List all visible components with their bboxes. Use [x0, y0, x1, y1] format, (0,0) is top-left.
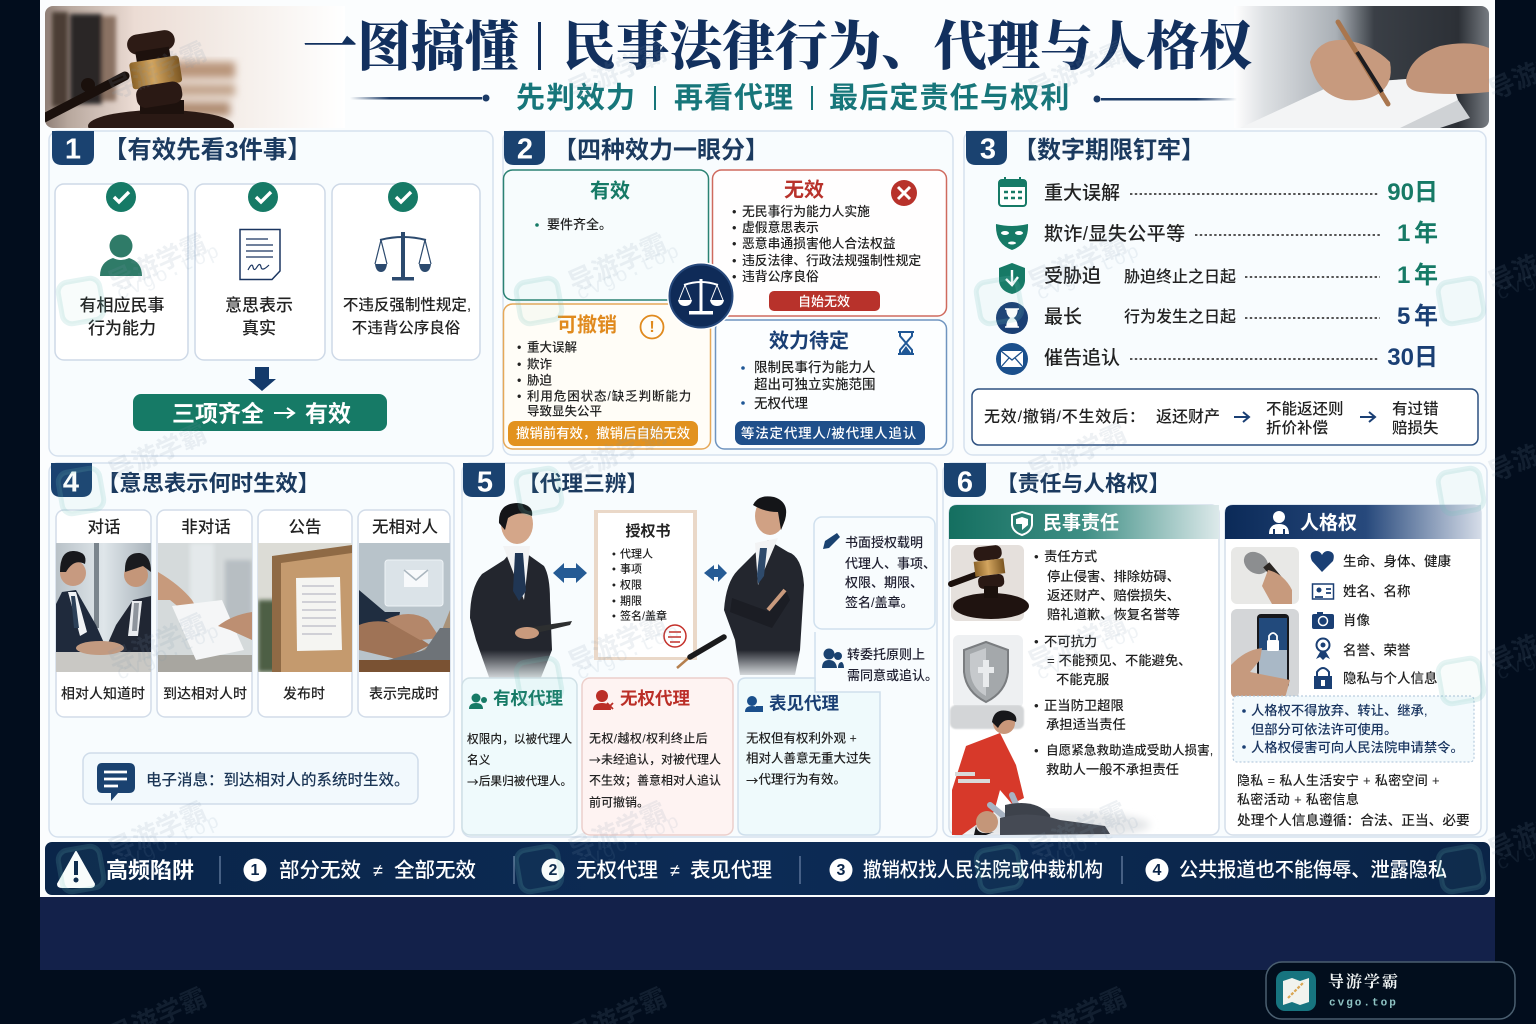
row: demand ratification: 催告追认: [1044, 347, 1120, 369]
photo: shield: [953, 635, 1023, 708]
document: power of attorney: [594, 510, 724, 668]
watermarks: 导游学霸: [104, 228, 211, 298]
card: void: 违反法律、行政法规强制性规定: [742, 253, 921, 268]
header banner: [45, 6, 1489, 128]
illustration: agent: [724, 496, 810, 680]
watermarks: cvgo.top: [113, 620, 225, 687]
watermarks: cvgo.top: [1033, 620, 1145, 687]
note: written authorization: 权限、期限、: [845, 575, 923, 590]
card: dialogue: 相对人知道时: [61, 686, 145, 702]
result button: 有效: [305, 400, 351, 426]
trap 2: 无权代理: [576, 859, 658, 882]
card: valid: [504, 170, 708, 300]
card: dialogue: [56, 510, 151, 717]
card: genuine intent: [195, 182, 325, 360]
text: liability methods: [1034, 548, 1213, 777]
box: consequences after invalidity: [972, 389, 1478, 445]
watermarks: 导游学霸: [564, 608, 671, 678]
card: void: 无民事行为能力人实施: [742, 204, 870, 219]
photo: gavel: [951, 544, 1029, 621]
row: duress: 1 年: [1397, 262, 1438, 289]
card: pending: 等法定代理人/被代理人追认: [741, 425, 917, 441]
card: unauthorized agency: 前可撤销。: [589, 794, 649, 810]
badge 1: [52, 131, 94, 166]
text: liability methods: = 不能预见、不能避免、: [1047, 652, 1191, 668]
card: voidable: 利用危困状态/缺乏判断能力: [527, 388, 692, 404]
watermarks: 导游学霸: [1024, 608, 1131, 678]
panel 4: when declaration takes effect: [49, 463, 454, 837]
card: unauthorized agency: →未经追认，对被代理人: [589, 751, 721, 768]
illustration: principal: [470, 503, 575, 684]
card: void: [712, 170, 946, 316]
watermarks: 导游学霸: [1024, 36, 1131, 106]
brand badge: 导游学霸: [1328, 973, 1400, 991]
card: void: 虚假意思表示: [742, 220, 819, 235]
trap 3: 3: [837, 862, 846, 879]
box: consequences after invalidity: 返还财产: [1156, 408, 1220, 426]
box: consequences after invalidity: 有过错: [1392, 400, 1439, 418]
card: no counterparty: 无相对人: [372, 518, 438, 536]
watermarks: 导游学霸: [1024, 228, 1131, 298]
watermarks: cvgo.top: [573, 620, 685, 687]
badge 3: 3: [980, 134, 996, 166]
card: public notice: 公告: [288, 518, 322, 536]
heading 4: 【意思表示何时生效】: [97, 471, 320, 496]
watermarks: 导游学霸: [564, 36, 671, 106]
card: pending: 无权代理: [754, 396, 808, 411]
document: power of attorney: •: [612, 610, 616, 622]
card: capacity: 有相应民事: [80, 296, 164, 315]
card: pending: 效力待定: [769, 328, 849, 352]
note: written authorization: 书面授权载明: [845, 535, 923, 550]
card: authorized agency: 有权代理: [493, 688, 563, 708]
row: demand ratification: [996, 343, 1438, 375]
watermarks: 导游学霸: [104, 418, 211, 488]
card: genuine intent: 意思表示: [225, 296, 293, 315]
note: personality rights rules: 人格权侵害可向人民法院申请禁令。: [1251, 739, 1464, 755]
watermarks: 导游学霸: [564, 418, 671, 488]
badge 4: 4: [63, 466, 79, 498]
watermarks: cvgo.top: [1033, 810, 1145, 877]
card: pending: 限制民事行为能力人: [754, 360, 876, 375]
card: pending: 超出可独立实施范围: [754, 376, 876, 392]
footer: frequent traps: [45, 842, 1490, 895]
subtitle: 先判效力: [516, 82, 636, 114]
panel 6: liability and personality rights: [943, 463, 1487, 839]
card: no counterparty: 表示完成时: [369, 686, 439, 702]
card: personality rights: [1225, 505, 1481, 835]
card: apparent agency: 相对人善意无重大过失: [746, 750, 872, 766]
card: civil liability: [949, 505, 1219, 839]
text: privacy definition: 处理个人信息遵循：合法、正当、必要: [1237, 812, 1470, 828]
card: non-dialogue: 到达相对人时: [163, 686, 247, 702]
subtitle: 再看代理: [674, 82, 794, 114]
document: power of attorney: 期限: [620, 594, 642, 608]
panel 3: time limits: [964, 131, 1486, 455]
icon list: rights: 名誉、荣誉: [1343, 643, 1411, 658]
card: void: 自始无效: [798, 294, 850, 309]
heading 2: 【四种效力一眼分】: [553, 137, 769, 164]
note: written authorization: 签名/盖章。: [845, 595, 914, 610]
document: power of attorney: 签名/盖章: [620, 608, 667, 622]
watermarks: cvgo.top: [573, 240, 685, 307]
text: liability methods: 返还财产、赔偿损失、: [1047, 588, 1180, 603]
text: privacy definition: 私密活动 + 私密信息: [1237, 792, 1359, 807]
text: privacy definition: 隐私 = 私人生活安宁 + 私密空间 +: [1237, 773, 1440, 788]
box: consequences after invalidity: 赔损失: [1392, 419, 1439, 437]
row: maximum: [996, 302, 1438, 334]
note: personality rights rules: 人格权不得放弃、转让、继承,: [1251, 702, 1428, 718]
card: void: 无效: [784, 178, 824, 202]
icon list: rights: 隐私与个人信息: [1343, 670, 1438, 686]
watermarks: 导游学霸: [1024, 796, 1131, 866]
card: pending: [716, 320, 946, 449]
icon list: rights: 生命、身体、健康: [1343, 553, 1451, 569]
row: maximum: 最长: [1044, 306, 1082, 328]
label: frequent traps: 高频陷阱: [106, 858, 194, 883]
arrow: double: [553, 563, 587, 583]
box: consequences after invalidity: 无效/撤销/不生效后：: [984, 408, 1146, 426]
photo: locked phone: [1231, 609, 1299, 698]
note: written authorization: 代理人、事项、: [845, 556, 936, 571]
note: personality rights rules: [1233, 696, 1474, 762]
document: power of attorney: •: [612, 596, 616, 608]
badge 2: 2: [517, 134, 533, 166]
row: duress: [999, 262, 1438, 294]
trap 4: 4: [1153, 862, 1162, 879]
text: liability methods: •: [1034, 549, 1039, 564]
row: maximum: 行为发生之日起: [1124, 308, 1236, 326]
document: power of attorney: •: [612, 548, 616, 560]
photo: hand signing: [1234, 6, 1489, 128]
trap 1: 1: [251, 862, 260, 879]
card: voidable: 可撤销: [557, 314, 617, 336]
trap 2: 表见代理: [690, 859, 772, 882]
callout: electronic message: [83, 753, 418, 804]
card: apparent agency: 无权但有权利外观 +: [746, 730, 857, 746]
row: fraud: 1 年: [1397, 220, 1438, 247]
icon list: rights: [1311, 551, 1451, 689]
row: fraud: 欺诈/显失公平等: [1044, 223, 1185, 245]
title: 民事法律行为、代理与人格权: [563, 18, 1252, 76]
card: void: 违背公序良俗: [742, 269, 819, 284]
card: dialogue: 对话: [88, 518, 120, 536]
card: non-dialogue: [157, 510, 252, 717]
card: public notice: [258, 510, 352, 717]
card: lawful: [332, 182, 480, 360]
heading 3: 【数字期限钉牢】: [1013, 137, 1205, 164]
watermarks: 导游学霸: [1024, 418, 1131, 488]
card: voidable: 欺诈: [527, 356, 553, 372]
text: liability methods: 不可抗力: [1044, 633, 1097, 649]
watermarks: 导游学霸: [104, 796, 211, 866]
trap 2: ≠: [670, 860, 680, 880]
document: power of attorney: 事项: [620, 562, 642, 576]
watermarks: 导游学霸: [104, 36, 211, 106]
card: void: •: [732, 253, 736, 268]
card: voidable: 重大误解: [527, 340, 578, 354]
note: sub-delegation: 需同意或追认。: [847, 668, 938, 683]
row: major mistake: [999, 177, 1438, 206]
card: apparent agency: [738, 678, 880, 835]
badge 6: 6: [957, 466, 973, 498]
note: personality rights rules: 但部分可依法许可使用。: [1251, 721, 1397, 737]
text: liability methods: •: [1034, 698, 1039, 713]
box: consequences after invalidity: 折价补偿: [1266, 419, 1328, 437]
row: duress: 胁迫终止之日起: [1124, 268, 1236, 286]
title: 一图搞懂: [303, 18, 519, 78]
text: liability methods: 正当防卫超限: [1044, 698, 1124, 713]
card: unauthorized agency: [582, 678, 733, 835]
trap 3: 撤销权找人民法院或仲裁机构: [863, 858, 1103, 882]
card: void: •: [732, 220, 736, 235]
card: voidable: [504, 304, 710, 449]
text: liability methods: 承担适当责任: [1046, 717, 1126, 732]
badge 4: [51, 463, 92, 498]
row: major mistake: 重大误解: [1044, 182, 1120, 204]
row: demand ratification: 30日: [1387, 344, 1438, 371]
text: liability methods: 不能克服: [1056, 672, 1109, 687]
watermarks: cvgo.top: [573, 810, 685, 877]
watermarks: cvgo.top: [1033, 240, 1145, 307]
arrow down: [248, 367, 276, 391]
card: voidable: •: [517, 390, 521, 404]
card: voidable: •: [517, 374, 521, 388]
row: maximum: 5 年: [1397, 303, 1438, 330]
card: civil liability: 民事责任: [1043, 512, 1119, 534]
text: liability methods: 责任方式: [1044, 548, 1097, 564]
text: liability methods: 救助人一般不承担责任: [1046, 762, 1179, 777]
note: sub-delegation: 转委托原则上: [847, 647, 925, 662]
trap 2: 2: [549, 862, 558, 879]
note: sub-delegation: [814, 630, 938, 690]
text: liability methods: 停止侵害、排除妨碍、: [1047, 568, 1180, 584]
icon: warning: [58, 852, 94, 887]
card: apparent agency: →代理行为有效。: [746, 770, 846, 789]
result button: [133, 394, 387, 431]
card: no counterparty: [358, 510, 450, 717]
badge 3: [966, 131, 1007, 166]
text: liability methods: 自愿紧急救助造成受助人损害,: [1046, 742, 1213, 758]
card: void: •: [732, 269, 736, 284]
panel 5: three kinds of agency: [462, 463, 938, 837]
card: valid: 要件齐全。: [547, 217, 612, 232]
trap 2: [542, 858, 772, 882]
subtitle: [350, 82, 1237, 114]
badge 2: [504, 131, 545, 166]
card: voidable: •: [517, 340, 521, 354]
icon list: rights: 姓名、名称: [1343, 584, 1411, 599]
watermarks: cvgo.top: [113, 240, 225, 307]
card: capacity: 行为能力: [88, 319, 156, 338]
card: valid: 有效: [590, 180, 630, 202]
text: privacy definition: [1237, 773, 1470, 828]
watermarks: cvgo.top: [113, 810, 225, 877]
text: liability methods: •: [1034, 634, 1039, 649]
icon: scales seal: [667, 262, 735, 330]
card: authorized agency: 名义: [467, 753, 491, 767]
card: public notice: 发布时: [283, 686, 325, 702]
photo: hand with microphone: [1231, 547, 1299, 604]
card: unauthorized agency: 无权代理: [620, 688, 690, 708]
row: duress: 受胁迫: [1044, 265, 1101, 287]
photo: first responder: [950, 705, 1150, 839]
row: major mistake: 90日: [1387, 179, 1438, 206]
card: voidable: •: [517, 358, 521, 372]
text: liability methods: 赔礼道歉、恢复名誉等: [1047, 606, 1180, 622]
badge 5: [463, 463, 505, 498]
card: personality rights: 人格权: [1300, 512, 1357, 534]
watermarks: 导游学霸: [564, 796, 671, 866]
document: power of attorney: 代理人: [620, 548, 653, 560]
trap 1: 部分无效: [279, 859, 361, 882]
badge 5: 5: [477, 466, 493, 498]
subtitle: 最后定责任与权利: [829, 82, 1071, 114]
row: fraud: [996, 220, 1438, 250]
heading 5: 【代理三辨】: [518, 471, 648, 496]
callout: electronic message: 电子消息：到达相对人的系统时生效。: [146, 770, 410, 789]
heading 6: 【责任与人格权】: [996, 471, 1170, 496]
card: unauthorized agency: 无权/越权/权利终止后: [589, 730, 708, 746]
trap 4: 公共报道也不能侮辱、泄露隐私: [1179, 858, 1447, 882]
document: power of attorney: 授权书: [625, 522, 671, 540]
card: apparent agency: 表见代理: [769, 694, 839, 714]
text: liability methods: •: [1034, 743, 1039, 758]
brand badge: [1266, 962, 1515, 1019]
watermarks: 导游学霸: [104, 608, 211, 678]
document: power of attorney: 权限: [620, 578, 642, 592]
card: lawful: 不违背公序良俗: [352, 318, 461, 337]
box: consequences after invalidity: 不能返还则: [1266, 400, 1344, 418]
card: capacity: [55, 182, 188, 360]
badge 1: 1: [65, 134, 81, 166]
card: void: •: [732, 204, 736, 219]
arrow: right: [704, 564, 727, 582]
card: genuine intent: 真实: [242, 318, 276, 338]
card: voidable: 胁迫: [527, 372, 553, 388]
document: power of attorney: •: [612, 564, 616, 576]
panel 1: three conditions of validity: [49, 131, 493, 456]
card: authorized agency: →后果归被代理人。: [467, 773, 572, 790]
card: authorized agency: [462, 678, 577, 835]
note: written authorization: [814, 517, 936, 629]
card: unauthorized agency: 不生效；善意相对人追认: [589, 772, 721, 788]
card: voidable: !: [649, 319, 655, 336]
card: authorized agency: 权限内，以被代理人: [467, 732, 573, 746]
card: void: 恶意串通损害他人合法权益: [742, 236, 896, 251]
trap 1: [244, 858, 476, 882]
card: voidable: 撤销前有效，撤销后自始无效: [516, 425, 691, 441]
document: power of attorney: •: [612, 580, 616, 592]
result button: 三项齐全: [172, 400, 264, 426]
icon list: rights: 肖像: [1343, 613, 1370, 628]
photo: judge gavel: [45, 6, 300, 128]
trap 1: 全部无效: [394, 859, 476, 882]
brand badge: cvgo.top: [1329, 998, 1398, 1010]
watermarks: 导游学霸: [564, 228, 671, 298]
heading 1: 【有效先看3件事】: [103, 137, 312, 164]
panel 2: four kinds of validity: [503, 131, 953, 455]
trap 1: ≠: [373, 860, 383, 880]
badge 6: [944, 463, 986, 498]
card: void: •: [732, 236, 736, 251]
card: lawful: 不违反强制性规定,: [343, 295, 471, 314]
card: non-dialogue: 非对话: [181, 518, 231, 536]
card: voidable: 导致显失公平: [527, 404, 602, 418]
